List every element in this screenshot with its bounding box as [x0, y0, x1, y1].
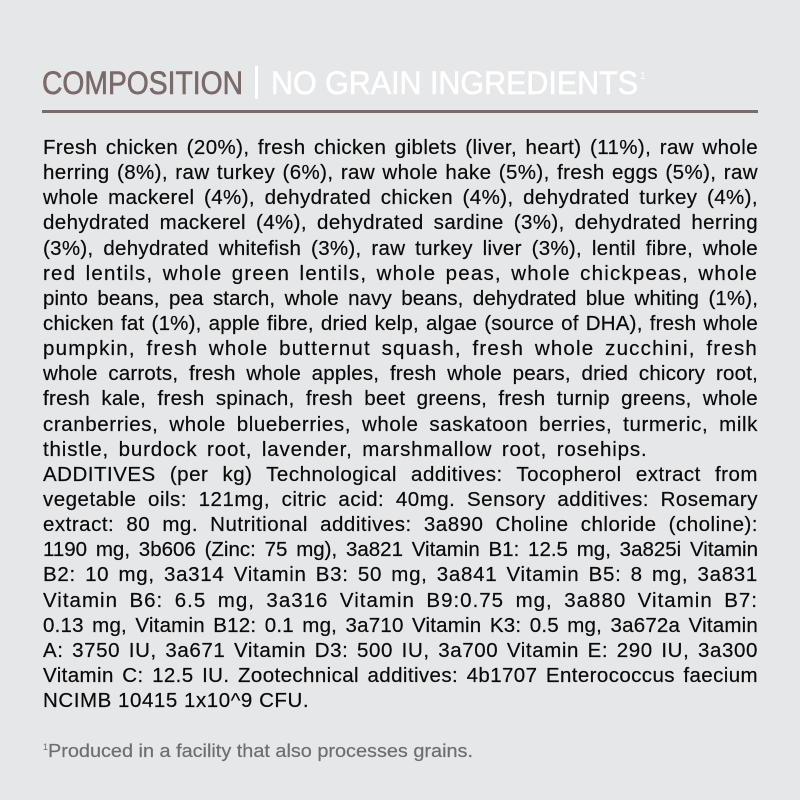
ingredients and additives text block: Fresh chicken (20%), fresh chicken giblets (liver, heart) (11%), raw whole: [43, 136, 758, 159]
footnote: Produced in a facility that also processes grains.: [48, 740, 473, 761]
ingredients and additives text block: (3%), dehydrated whitefish (3%), raw turkey liver (3%), lentil fibre, whole: [43, 237, 758, 260]
ingredients and additives text block: pinto beans, pea starch, whole navy beans, dehydrated blue whiting (1%),: [43, 287, 758, 310]
heading: composition, no grain ingredients: COMPOSITION: [42, 65, 243, 101]
heading: composition, no grain ingredients: [42, 65, 758, 113]
ingredients and additives text block: Vitamin C: 12.5 IU. Zootechnical additives: 4b1707 Enterococcus faecium: [43, 664, 758, 687]
ingredients and additives text block: 0.13 mg, Vitamin B12: 0.1 mg, 3a710 Vitamin K3: 0.5 mg, 3a672a Vitamin: [43, 614, 758, 637]
ingredients and additives text block: red lentils, whole green lentils, whole peas, whole chickpeas, whole: [43, 262, 758, 285]
footnote: 1: [43, 742, 48, 752]
ingredients and additives text block: fresh kale, fresh spinach, fresh beet greens, fresh turnip greens, whole: [43, 387, 758, 410]
ingredients and additives text block: vegetable oils: 121mg, citric acid: 40mg. Sensory additives: Rosemary: [43, 488, 758, 511]
ingredients and additives text block: chicken fat (1%), apple fibre, dried kelp, algae (source of DHA), fresh whole: [43, 312, 758, 335]
ingredients and additives text block: 1190 mg, 3b606 (Zinc: 75 mg), 3a821 Vitamin B1: 12.5 mg, 3a825i Vitamin: [43, 538, 758, 561]
ingredients and additives text block: cranberries, whole blueberries, whole saskatoon berries, turmeric, milk: [43, 413, 758, 436]
ingredients and additives text block: whole carrots, fresh whole apples, fresh whole pears, dried chicory root,: [43, 362, 758, 385]
ingredients and additives text block: B2: 10 mg, 3a314 Vitamin B3: 50 mg, 3a841 Vitamin B5: 8 mg, 3a831: [43, 563, 758, 586]
ingredients and additives text block: thistle, burdock root, lavender, marshmallow root, rosehips.: [43, 438, 648, 461]
ingredients and additives text block: [42, 136, 758, 712]
ingredients and additives text block: dehydrated mackerel (4%), dehydrated sardine (3%), dehydrated herring: [43, 211, 758, 234]
ingredients and additives text block: whole mackerel (4%), dehydrated chicken (4%), dehydrated turkey (4%),: [43, 186, 758, 209]
heading: composition, no grain ingredients: 1: [640, 71, 646, 82]
ingredients and additives text block: Vitamin B6: 6.5 mg, 3a316 Vitamin B9:0.75 mg, 3a880 Vitamin B7:: [43, 589, 758, 612]
ingredients and additives text block: herring (8%), raw turkey (6%), raw whole hake (5%), fresh eggs (5%), raw: [43, 161, 758, 184]
ingredients and additives text block: extract: 80 mg. Nutritional additives: 3a890 Choline chloride (choline):: [43, 513, 758, 536]
heading: composition, no grain ingredients: NO GRAIN INGREDIENTS: [271, 65, 638, 101]
ingredients and additives text block: NCIMB 10415 1x10^9 CFU.: [43, 689, 309, 712]
ingredients and additives text block: A: 3750 IU, 3a671 Vitamin D3: 500 IU, 3a700 Vitamin E: 290 IU, 3a300: [43, 639, 758, 662]
ingredients and additives text block: pumpkin, fresh whole butternut squash, fresh whole zucchini, fresh: [43, 337, 758, 360]
ingredients and additives text block: ADDITIVES (per kg) Technological additives: Tocopherol extract from: [43, 463, 758, 486]
